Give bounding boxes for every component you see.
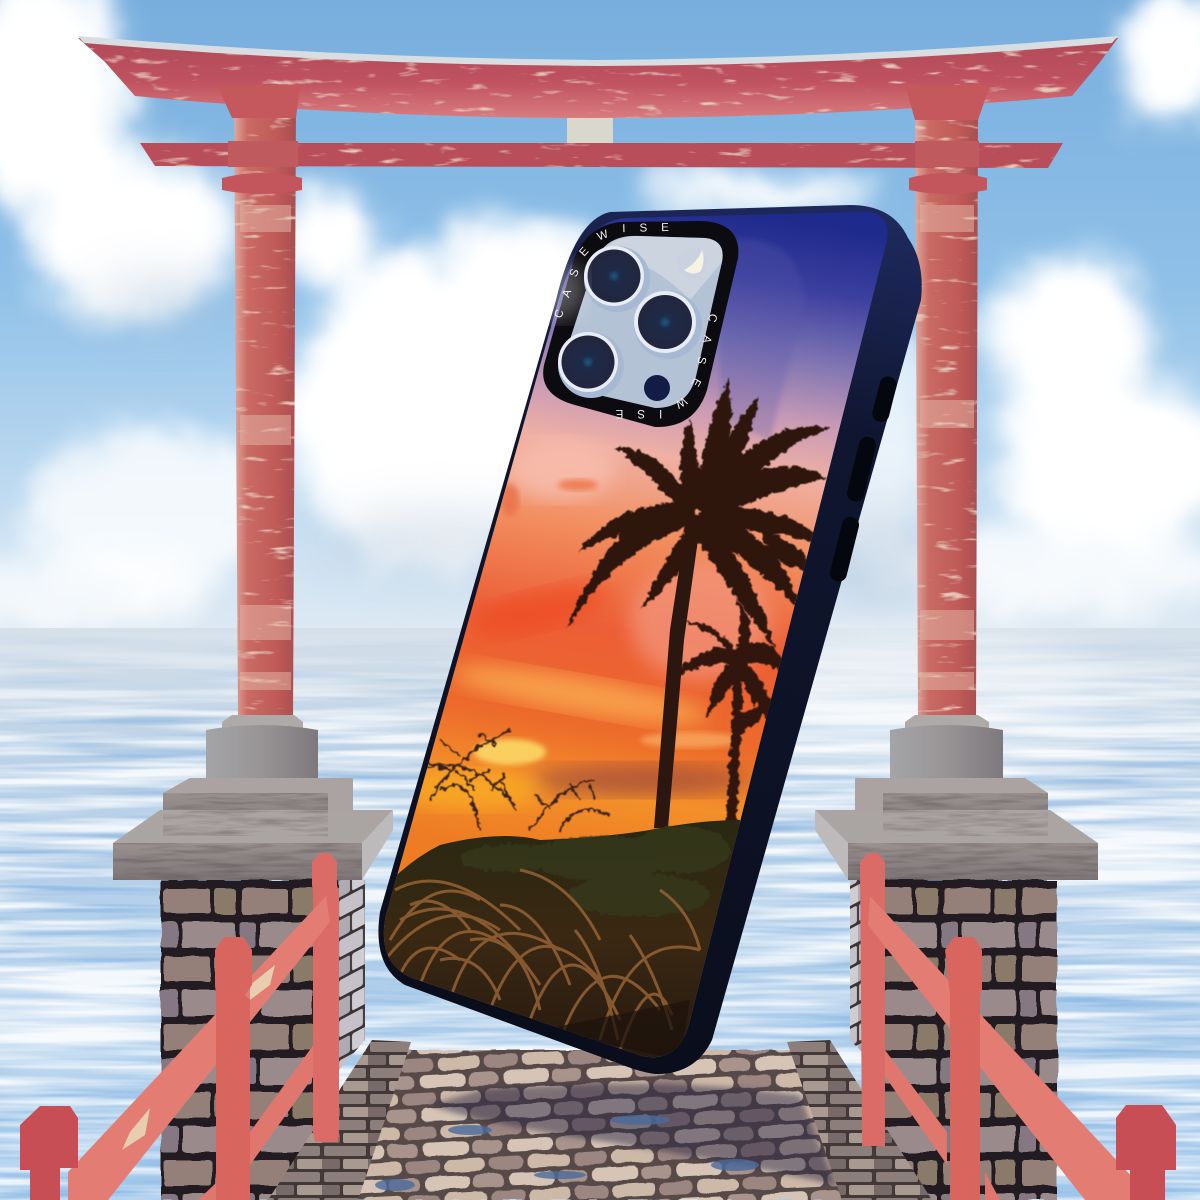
- beam top edge: [78, 36, 1118, 66]
- right pillar: [915, 100, 978, 720]
- lens top left: [584, 246, 650, 312]
- dry grass blades: [385, 870, 700, 1050]
- left pillar cap: [217, 85, 300, 118]
- sunset sky: [370, 200, 900, 1070]
- camera plate: [564, 236, 723, 408]
- cloud shadows: [90, 275, 940, 620]
- right curb: [787, 1040, 932, 1200]
- camera bump ring: [543, 221, 738, 427]
- end post: [20, 1106, 78, 1200]
- second palm: [665, 598, 790, 826]
- lower rail: [198, 1025, 331, 1200]
- peeling paint: [70, 30, 1130, 730]
- upper rail: [68, 896, 330, 1200]
- sky background: [0, 0, 1200, 630]
- upper rail: [868, 896, 1135, 1200]
- main palm: [567, 378, 830, 828]
- right pillar collar: [909, 173, 987, 194]
- sunset clouds: [400, 440, 770, 810]
- left pillar: [234, 100, 296, 720]
- phone case artwork: [384, 212, 888, 1058]
- left pillar collar: [222, 173, 302, 194]
- camera control button: [871, 375, 898, 423]
- lower rail: [866, 1025, 1000, 1200]
- front post: [945, 937, 982, 1200]
- right railing: [860, 853, 1176, 1200]
- volume down: [828, 515, 861, 583]
- lens right: [634, 291, 702, 359]
- brand text: CASEWISE: [554, 223, 668, 318]
- side buttons: [828, 375, 898, 583]
- phone shadow on path: [430, 1084, 835, 1185]
- leafy shrubs: [460, 826, 730, 917]
- sea oats: [420, 730, 610, 830]
- rail paint chips: [122, 965, 275, 1150]
- puddles: [375, 1115, 759, 1191]
- torii gate: [70, 30, 1130, 730]
- flash: [677, 248, 707, 278]
- phone body: [378, 205, 922, 1074]
- front post: [215, 937, 252, 1200]
- center strut: [567, 104, 613, 144]
- back post: [860, 853, 885, 1146]
- end post: [1116, 1105, 1176, 1200]
- sea: [0, 628, 1200, 1200]
- lower crossbeam: [140, 143, 1063, 168]
- left railing: [20, 853, 339, 1200]
- volume up: [845, 435, 878, 503]
- left brick pier: [161, 880, 365, 1200]
- right brick pier: [850, 880, 1057, 1200]
- left stone base: [113, 715, 393, 1200]
- lens flare: [526, 260, 586, 320]
- sky lighter panel: [720, 239, 805, 440]
- upper beam: [78, 38, 1118, 118]
- lens bottom left: [558, 332, 624, 398]
- right pillar cap: [905, 85, 990, 120]
- right stone base: [815, 715, 1098, 1200]
- stone walkway: [268, 1040, 932, 1200]
- back post: [312, 853, 339, 1142]
- right crossbeam wrap: [915, 141, 979, 167]
- brand text repeat: CASEWISE: [616, 314, 717, 418]
- foreground vegetation: [384, 820, 740, 1058]
- lidar sensor: [644, 375, 670, 401]
- clouds: [0, 0, 1200, 630]
- left curb: [268, 1040, 411, 1200]
- left crossbeam wrap: [228, 141, 298, 167]
